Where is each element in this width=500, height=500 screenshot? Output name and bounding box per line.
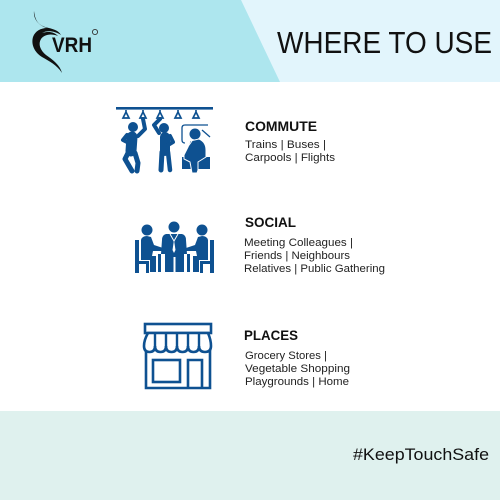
logo: VRH	[32, 11, 98, 73]
text: commute	[245, 118, 336, 164]
text: commute: Trains | Buses |	[245, 139, 326, 151]
logo: VRH: VRH	[52, 34, 92, 57]
text: commute: Carpools | Flights	[245, 152, 336, 164]
icon: social	[135, 222, 214, 273]
footer band	[0, 411, 500, 500]
text: places	[244, 327, 350, 388]
icon: places	[144, 324, 211, 388]
text: social	[244, 214, 385, 275]
text: commute: COMMUTE	[245, 118, 317, 134]
text: places: Playgrounds | Home	[245, 376, 349, 388]
hashtag: #KeepTouchSafe	[353, 445, 489, 464]
header band	[0, 0, 500, 82]
icon: commute	[116, 107, 213, 173]
text: places: PLACES	[244, 327, 298, 343]
text: social: Friends | Neighbours	[244, 250, 351, 262]
text: social: Relatives | Public Gathering	[244, 263, 385, 275]
text: places: Vegetable Shopping	[245, 363, 350, 375]
text: places: Grocery Stores |	[245, 350, 327, 362]
text: social: SOCIAL	[245, 214, 296, 230]
text: social: Meeting Colleagues |	[244, 237, 353, 249]
